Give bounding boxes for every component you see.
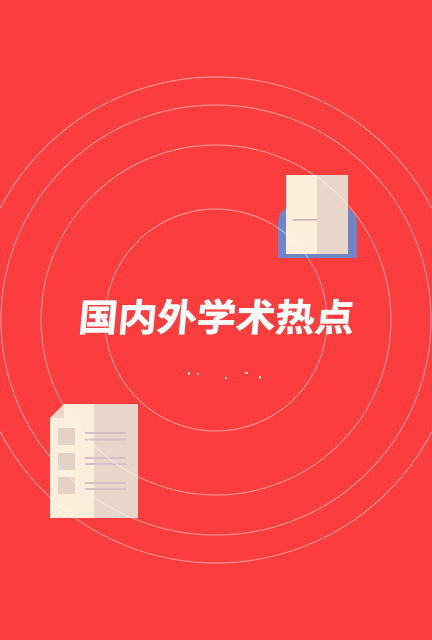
title: 国内外学术热点 (76, 288, 357, 343)
concentric circles (0, 77, 432, 563)
small faint dots under title (188, 372, 261, 379)
icon: open document with blue folder (278, 175, 357, 258)
icon: document with list (50, 404, 138, 518)
